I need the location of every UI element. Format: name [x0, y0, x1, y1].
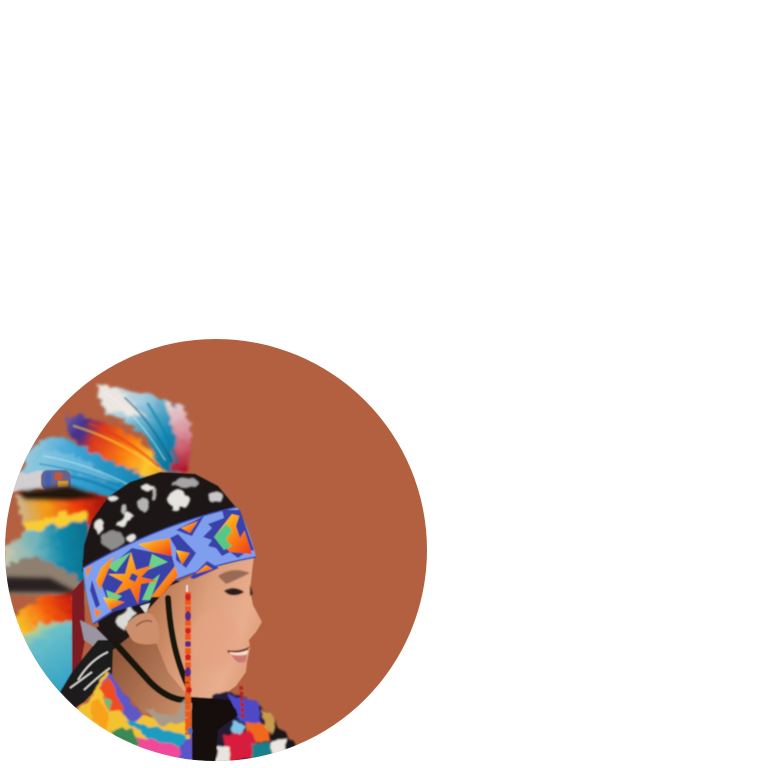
chin strap [116, 598, 190, 700]
band star motif [86, 538, 178, 618]
band right motif [203, 510, 254, 558]
beaded band [83, 507, 256, 624]
portrait illustration [5, 339, 427, 761]
cheek shading [190, 610, 240, 670]
hair [192, 697, 238, 768]
clothing right: regalia [211, 690, 297, 761]
dark red feather edge [72, 578, 85, 680]
bead string: headband to collar [185, 585, 192, 735]
bead string: second strand [241, 686, 243, 718]
face [146, 556, 262, 699]
clothing left: beaded collar [76, 668, 193, 760]
photo subject [0, 383, 295, 768]
band arrow motif [170, 516, 219, 579]
eyebrow and eye [218, 570, 253, 596]
cap skull print [95, 479, 223, 549]
cap [82, 472, 238, 650]
background circle [5, 339, 427, 761]
feathers: white plume and beaded wrap [5, 470, 71, 492]
feathers: lower left plume [0, 492, 106, 698]
feather strand texture [34, 392, 178, 492]
bandana and grey lining [60, 602, 151, 708]
ear [125, 613, 159, 644]
neck [111, 636, 193, 718]
lower plume dark bands [4, 486, 100, 594]
mouth [227, 646, 250, 663]
feathers: upper crest [20, 383, 192, 498]
